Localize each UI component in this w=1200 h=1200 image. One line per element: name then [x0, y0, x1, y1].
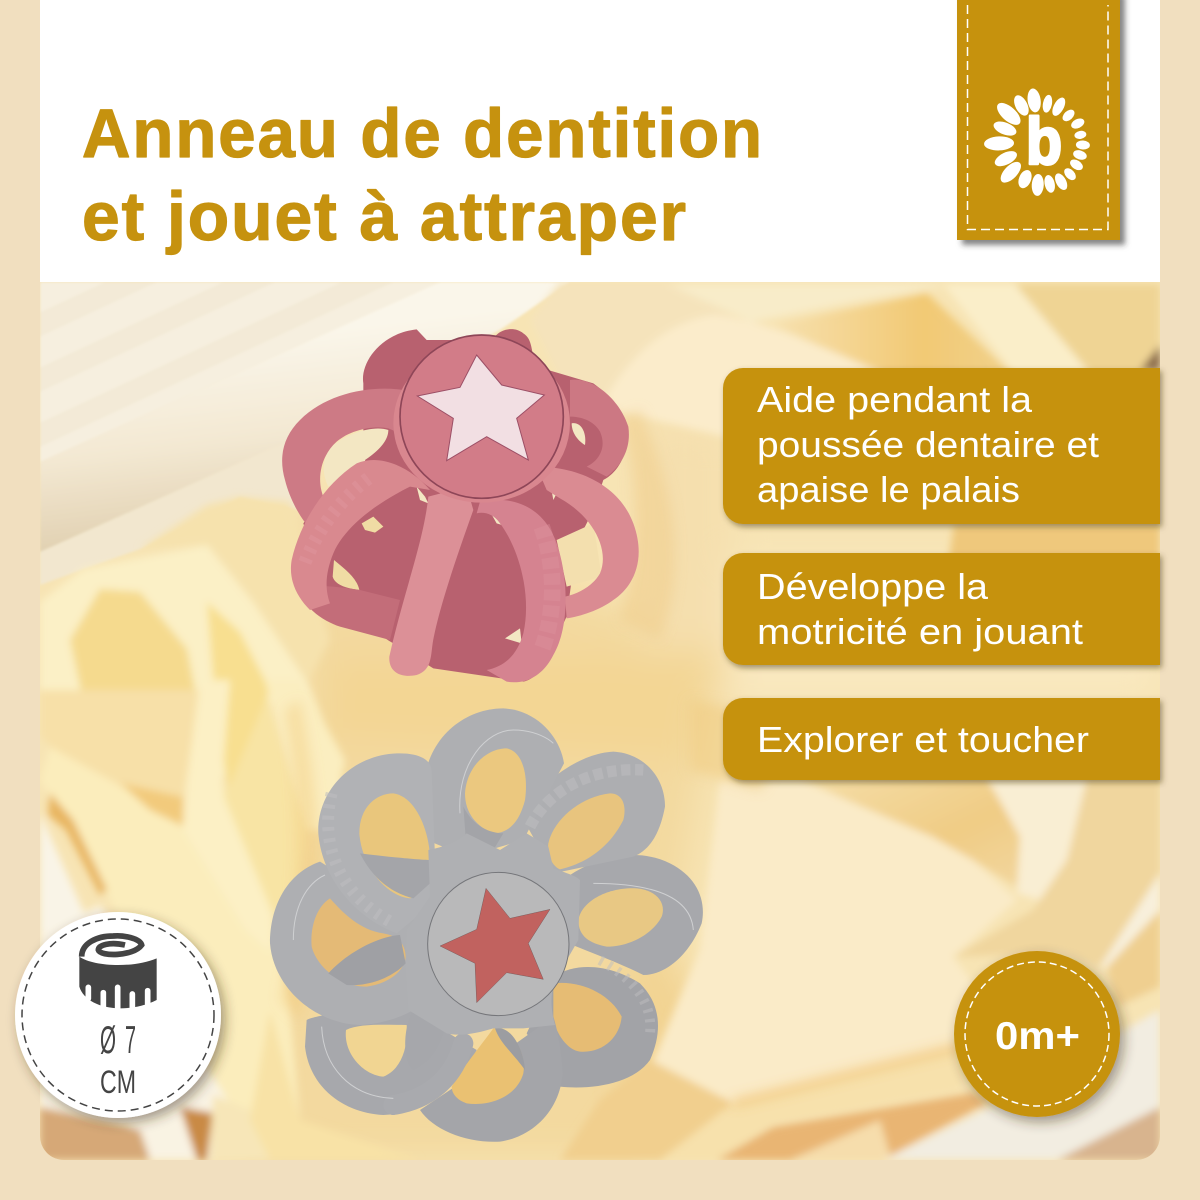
grey toy: top loop [423, 708, 564, 857]
grey flower teething toy [270, 708, 703, 1142]
logo letter b: b [1026, 104, 1062, 178]
bottom-right box and wood [883, 1010, 1160, 1160]
grey toy: rim ribs [328, 770, 650, 1033]
tag stitching [968, 5, 1108, 230]
grey toy: left loop [270, 862, 433, 1025]
pink toy: upper-right back arm [570, 380, 629, 477]
pink toy: upper-left back arm [282, 389, 403, 527]
box: floor [40, 440, 300, 585]
bottom ridge [678, 1064, 958, 1154]
callout: motor skills: motricité en jouant [757, 611, 1083, 652]
white header band [40, 0, 1160, 282]
pink toy: star [417, 355, 544, 461]
pink toy: right arm [537, 467, 639, 618]
pink toy: lower-left base [293, 573, 400, 640]
grey toy: right loop [560, 855, 703, 975]
unit label: CM [100, 1064, 136, 1100]
pale fold [40, 545, 345, 830]
grey toy: lower-right loop [527, 967, 658, 1087]
grey toy: red star [440, 888, 550, 1003]
photo: fabric background [40, 282, 1160, 1160]
icon: measuring tape [79, 936, 157, 1010]
fabric top layer [140, 497, 330, 682]
grey toy: bottom hole [452, 1028, 524, 1104]
logo tag [957, 0, 1120, 240]
grey toy: centre disc [428, 872, 569, 1016]
grey toy: back arms seen through holes [328, 807, 525, 1070]
callout: teething relief: Aide pendant la [757, 379, 1033, 420]
top right folds [667, 284, 1015, 322]
box: left strips [40, 813, 85, 935]
box: striped wall [40, 282, 440, 462]
pink toy: ribs [303, 478, 368, 567]
pink toy: ribbed lower-right arm [477, 500, 566, 682]
pink toy: see-through gaps [324, 423, 602, 643]
age badge [954, 951, 1120, 1117]
tag shape [957, 0, 1120, 240]
diameter label: Ø [100, 1019, 116, 1062]
pink toy: hub [393, 344, 570, 503]
age badge: 0m+ [995, 1015, 1080, 1058]
pink teething ball toy [282, 329, 639, 682]
title: Anneau de dentition [82, 95, 764, 172]
left folds [40, 690, 200, 800]
grey toy: lower-left loop [305, 1009, 477, 1115]
grey toy: bottom loop [420, 1017, 563, 1142]
callout: teething relief: poussée dentaire et [757, 424, 1099, 465]
callout: explore and touch [723, 698, 1160, 780]
callout: teething relief: apaise le palais [757, 469, 1020, 510]
pink toy: central front arm [389, 487, 473, 676]
bottom-left box [40, 903, 228, 1160]
pink toy: ribbed left arm [291, 460, 430, 610]
box: rim [40, 282, 570, 552]
grey toy: upper-left loop [318, 753, 437, 933]
callout: motor skills: Développe la [757, 566, 989, 607]
callout: explore and touch: Explorer et toucher [757, 719, 1089, 760]
grey toy: hub [406, 833, 580, 1035]
icon: flower petals [984, 88, 1090, 196]
callout: motor skills [723, 553, 1160, 665]
diameter label: 7 [125, 1019, 136, 1062]
middle right [946, 524, 1160, 553]
lower right pale cloth [650, 780, 1015, 1103]
grey toy: seam lines [293, 730, 693, 1098]
grey toy: ribbed lower-left front arm [393, 1043, 463, 1105]
pink toy: dark inner body [303, 329, 627, 682]
pink toy: centre disc [400, 335, 563, 498]
grey toy: upper-right loop [520, 752, 665, 873]
size badge [15, 912, 221, 1118]
title [82, 95, 764, 255]
title: et jouet à attraper [82, 178, 688, 255]
callout: teething relief [723, 368, 1160, 524]
lower right gold fold [818, 780, 1022, 884]
